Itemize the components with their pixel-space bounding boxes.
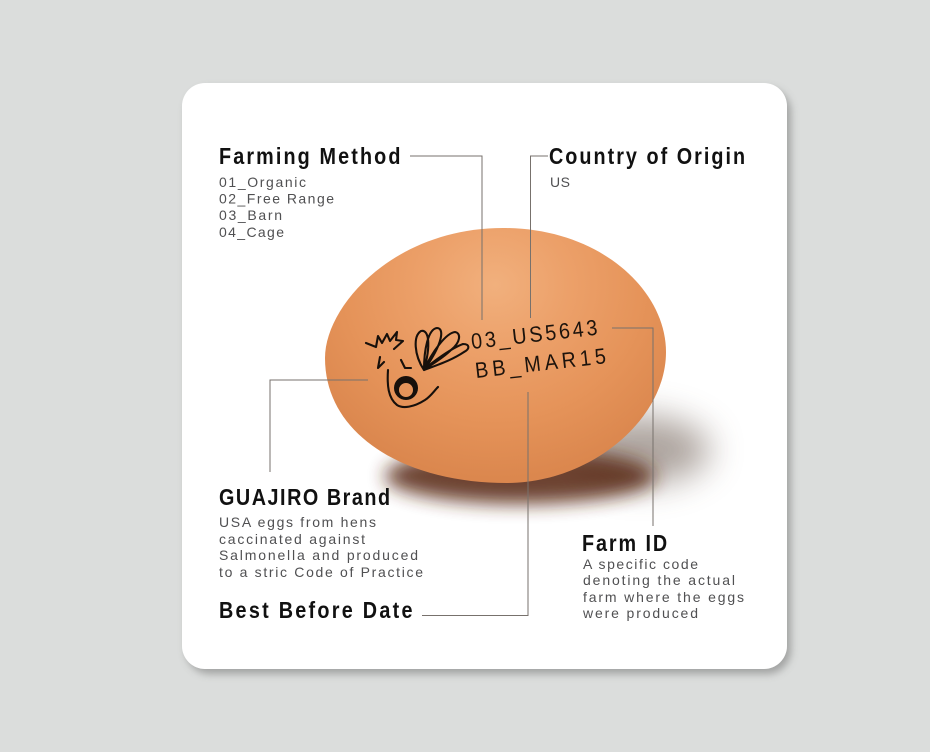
list: farming methods: 04_Cage (219, 224, 284, 240)
egg (325, 228, 666, 483)
block: country of origin (549, 144, 745, 190)
heading: country of origin: Country of Origin (549, 144, 745, 169)
text: brand description: Salmonella and produced (219, 547, 418, 563)
block: guajiro brand (219, 485, 423, 580)
leader: brand (270, 380, 368, 472)
leader: farm id (612, 328, 653, 526)
logo: ring (394, 376, 418, 400)
leader: farming method (410, 156, 482, 320)
list: farming methods: 03_Barn (219, 207, 282, 223)
heading: best before date: Best Before Date (219, 598, 413, 623)
heading: guajiro brand: GUAJIRO Brand (219, 485, 390, 510)
text: farm id description (582, 556, 744, 621)
list: farming methods: 01_Organic (219, 174, 306, 190)
egg print: code line 1: 03_US5643 (470, 316, 599, 354)
list: farming methods (219, 174, 334, 240)
egg cast shadow (385, 416, 710, 504)
text: brand description: caccinated against (219, 531, 365, 547)
block: farming method (219, 144, 400, 240)
text: brand description (219, 514, 423, 580)
logo: comb burst (366, 332, 403, 349)
heading: farming method: Farming Method (219, 144, 400, 169)
text: brand description: USA eggs from hens (219, 514, 376, 530)
text: farm id description: denoting the actual (583, 572, 735, 588)
egg print: code line 2: BB_MAR15 (474, 344, 607, 383)
egg print: logo (366, 328, 468, 407)
text: farm id description: A specific code (583, 556, 698, 572)
card shadow (186, 88, 791, 674)
text: brand description: to a stric Code of Practice (219, 564, 423, 580)
text: farm id description: were produced (582, 605, 698, 621)
logo: wing feathers (416, 328, 468, 370)
leader: country of origin (530, 156, 548, 318)
text: country: US (550, 174, 570, 190)
list: farming methods: 02_Free Range (219, 190, 334, 206)
text: farm id description: farm where the eggs (583, 589, 744, 605)
leader: best before date (422, 392, 528, 616)
block: farm id (582, 531, 744, 621)
logo: eye ticks (378, 357, 411, 368)
heading: farm id: Farm ID (582, 531, 667, 556)
white card (182, 83, 787, 669)
logo: body curve (388, 370, 438, 407)
